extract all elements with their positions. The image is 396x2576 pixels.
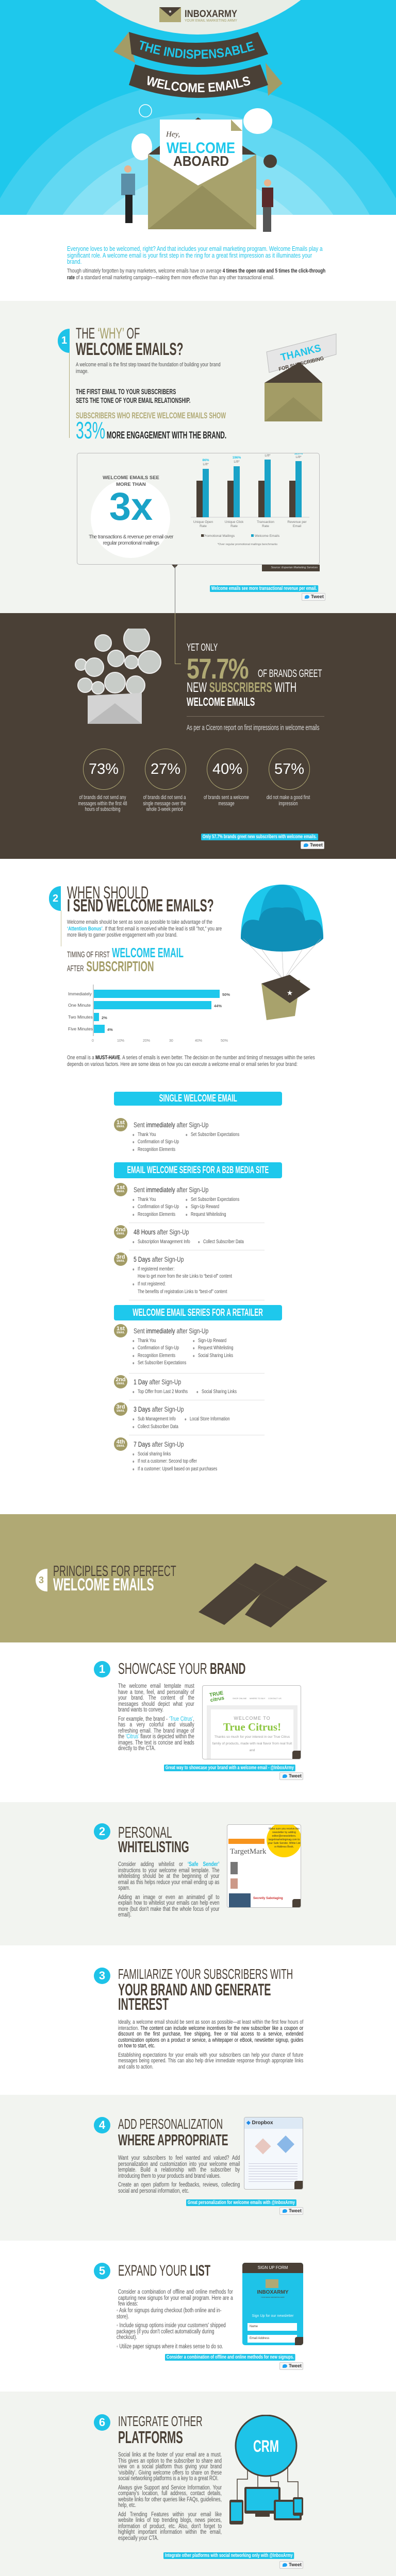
chart box: The transactions & revenue per email over regular promotional mailings <box>89 534 173 546</box>
stat circles: of brands sent a welcome message <box>204 794 249 807</box>
section 1: why: 33% MORE ENGAGEMENT WITH THE BRAND. <box>76 417 226 444</box>
section 2: when to send: If a customer: Upsell based on past purchases <box>138 1466 217 1472</box>
section 2: when to send: Sent immediately after Sign-Up <box>134 1327 208 1335</box>
section 2: when to send: Collect Subscriber Data <box>203 1239 244 1245</box>
principle 1: showcase brand: 1 <box>99 1663 105 1675</box>
bar chart: Lift* <box>265 454 271 457</box>
image: sign up form: INBOXARMY <box>257 2290 289 2295</box>
bar chart: Lift* <box>234 460 240 464</box>
principle 6: integrate platforms <box>0 2392 396 2576</box>
image: true citrus email: True Citrus! <box>223 1721 281 1733</box>
section 2: when to send: 2nd <box>116 1377 126 1383</box>
illustration: CRM: CRM <box>253 2437 279 2455</box>
section 2: when to send: Subscription Management Info <box>138 1239 190 1245</box>
tweet quote: Only 57.7% brands greet new subscribers with welcome emails. <box>203 834 317 840</box>
bar chart: timing: Five Minutes <box>68 1026 93 1031</box>
bar chart: Email <box>293 524 302 528</box>
principle 2: whitelisting: Consider adding whitelist or ‘Safe Sender’ instructions to your welcome email template. The whitelisting should be at the beginning of your email as this helps reduce your email ending up as spam. Adding an image or even an animated gif to explain how to whitelist your emails can help even more (but don't make that the whole focus of your email). <box>118 1861 220 1918</box>
stat circles: 73% <box>89 761 119 777</box>
image: targetmarketing newsletter: Make sure you receive this newsletter by adding editor@enewsletters. targetmarketingmag.com to your Safe Sender, White List or Address Book. <box>268 1827 301 1849</box>
bar chart: 196% <box>233 456 241 460</box>
section 2: when to send: 7 Days after Sign-Up <box>134 1440 184 1448</box>
illustration: people bubbles from envelope <box>75 629 161 724</box>
section 2: when to send: Confirmation of Sign-Up <box>138 1345 179 1351</box>
image: true citrus email: TRUE <box>209 1690 224 1698</box>
illustration: puzzle <box>199 1563 327 1628</box>
badge 1: 1 <box>61 335 67 346</box>
principle 6: integrate platforms: PLATFORMS <box>118 2428 183 2447</box>
image: targetmarketing newsletter: TargetMark <box>230 1848 266 1856</box>
section 3 header: principles: PRINCIPLES FOR PERFECT <box>53 1563 176 1580</box>
section 2: when to send: Set Subscriber Expectations <box>191 1132 239 1138</box>
bar chart: Revenue per <box>287 520 307 524</box>
bar chart <box>191 453 309 546</box>
badge 2 <box>49 886 61 911</box>
image: dropbox email <box>244 2117 303 2190</box>
principle 4: personalization: WHERE APPROPRIATE <box>118 2131 228 2149</box>
heading: WHEN SHOULD <box>67 883 148 903</box>
email series: b2b <box>114 1162 282 1178</box>
principle 5: expand list: Tweet <box>289 2363 302 2368</box>
stat circles: 40% <box>212 761 242 777</box>
principle 3: familiarize: INTEREST <box>118 1995 169 2013</box>
intro stat text: Though ultimately forgotten by many marketers, welcome emails have on average 4 times the open rate and 5 times the click-through rate of a standard email marketing campaign—making them more effective than any other transactional email. <box>67 268 325 280</box>
section 2: when to send: EMAIL <box>117 1382 125 1385</box>
section 2: when to send: 1st <box>117 1120 125 1126</box>
image: sign up form: SIGN UP FORM <box>258 2265 288 2270</box>
bar chart: timing: Two Minutes <box>68 1014 93 1020</box>
section 1: why: SUBSCRIBERS WHO RECEIVE WELCOME EMAILS SHOW <box>76 411 226 420</box>
chart title <box>67 945 184 974</box>
section 2: when to send: 1st <box>117 1184 125 1191</box>
illustration: thanks for subscribing: THANKS <box>279 343 322 364</box>
email series: retailer: WELCOME EMAIL SERIES FOR A RETAILER <box>133 1307 263 1318</box>
stat heading: 57.7% <box>187 652 248 685</box>
section 2: when to send: If registered member: <box>138 1266 174 1272</box>
principle 5: expand list: Consider a combination of offline and online methods for new signups. <box>167 2354 294 2360</box>
section 2: when to send: Sub Management Info <box>138 1416 176 1422</box>
heading: WELCOME EMAILS? <box>76 340 183 359</box>
section 2: when to send: 48 Hours after Sign-Up <box>134 1228 189 1236</box>
email series: single <box>114 1092 282 1106</box>
stat heading: NEW SUBSCRIBERS WITH <box>187 680 296 695</box>
principle 3: familiarize <box>0 1945 396 2095</box>
section 2: when to send: 5 Days after Sign-Up <box>134 1255 184 1263</box>
section 2: when to send: The benefits of registration Links to “best-of” content <box>138 1289 227 1295</box>
source tab: Source: Experian Marketing Services <box>271 566 318 569</box>
section 1: why: SETS THE TONE OF YOUR EMAIL RELATIONSHIP. <box>76 396 190 405</box>
bar chart: Transaction <box>257 520 274 524</box>
principle 2: whitelisting: PERSONAL <box>118 1823 172 1841</box>
heading: THE ‘WHY’ OF <box>76 325 140 342</box>
image: true citrus email <box>202 1685 301 1759</box>
illustration: thanks for subscribing: FOR SUBSCRIBING <box>278 355 325 372</box>
section 2: when to send: EMAIL <box>117 1445 125 1448</box>
image: sign up form: YOUR EMAIL MARKETING ARMY <box>261 2296 285 2298</box>
chart box: 3x <box>109 485 153 529</box>
principle 4: personalization: ADD PERSONALIZATION <box>118 2116 223 2132</box>
stat circles <box>78 749 310 812</box>
bar chart: timing: 50% <box>222 992 230 997</box>
section 2: when to send: EMAIL <box>117 1190 125 1193</box>
stat circles: did not make a good first impression <box>267 794 310 807</box>
stat heading <box>187 642 322 708</box>
envelope illustration: ABOARD <box>173 153 229 169</box>
section 2: when to send: Confirmation of Sign-Up <box>138 1139 179 1145</box>
image: targetmarketing newsletter <box>227 1824 301 1908</box>
tweet quote: Welcome emails see more transactional revenue per email. <box>211 586 317 591</box>
badge 2: 2 <box>53 893 58 904</box>
section 2: when to send: Local Store Information <box>190 1416 230 1422</box>
section 2: when to send: 3rd <box>116 1404 125 1410</box>
badge 1 <box>58 329 70 353</box>
principle 4: personalization: 4 <box>99 2119 105 2131</box>
stat heading: YET ONLY <box>187 642 218 653</box>
text: Welcome emails should be sent as soon as possible to take advantage of the ‘Attention Bonus’. If that first email is received while the lead is still "hot," you are more likely to garner positive engagement with your brand. <box>67 919 222 938</box>
section 2: when to send: 3rd <box>116 1254 125 1260</box>
title ribbon: WELCOME EMAILS <box>147 76 251 92</box>
chart box: WELCOME EMAILS SEE <box>103 475 159 481</box>
section 3 header: principles <box>0 1514 396 1642</box>
logo: YOUR EMAIL MARKETING ARMY <box>185 19 237 23</box>
image: dropbox email: ◆ Dropbox <box>246 2120 273 2126</box>
image: sign up form: Name <box>250 2325 258 2328</box>
illustration: CRM <box>229 2415 303 2524</box>
bar chart: timing: 0 <box>92 1039 94 1043</box>
email series: b2b: EMAIL WELCOME SERIES FOR A B2B MEDIA SITE <box>127 1164 269 1176</box>
intro text: Everyone loves to be welcomed, right? And that includes your email marketing program. Welcome Emails play a significant role. A welcome email is your first step in the ring for a great first impression as it illuminates your brand. <box>67 245 323 265</box>
chart box <box>77 453 320 565</box>
bar chart: Rate <box>262 524 269 528</box>
section 2: when to send: Top Offer from Last 2 Months <box>138 1389 188 1395</box>
stat heading: OF BRANDS GREET <box>258 668 322 680</box>
bar chart: *Over regular promotional mailings benchmarks <box>218 543 277 546</box>
principle 3: familiarize: FAMILIARIZE YOUR SUBSCRIBERS WITH <box>118 1966 293 1982</box>
principle 4: personalization: Tweet <box>289 2208 302 2213</box>
bar chart: timing: 20% <box>143 1039 150 1043</box>
people <box>121 165 273 232</box>
text: A welcome email is the first step toward the foundation of building your brand image. <box>76 362 221 374</box>
principle 3: familiarize: Ideally, a welcome email should be sent as soon as possible—at least within the first few hours of interaction. The content can include welcome incentives for the new subscriber like a coupon or discount on the first purchase, free shipping, free or trial access to a service, extended customization options on a product or service, a whitepaper or eBook, newsletter signup, guides on how to start, etc. Establishing expectations for your emails with your subscribers can help your chance of future messages being opened. This can also help drive immediate response through appropriate links and calls to action. <box>118 2019 303 2070</box>
bar chart: Rate <box>230 524 238 528</box>
principle 1: showcase brand: SHOWCASE YOUR BRAND <box>118 1659 245 1677</box>
principle 2: whitelisting: WHITELISTING <box>118 1838 189 1856</box>
section 2: when to send: Social sharing links <box>138 1451 171 1457</box>
section 1: why: THE FIRST EMAIL TO YOUR SUBSCRIBERS <box>76 387 176 396</box>
heading <box>67 883 214 916</box>
section: 57.7% stat: Tweet <box>310 842 323 848</box>
section 2: when to send: Request Whitelisting <box>198 1345 233 1351</box>
principle 5: expand list: 5 <box>99 2264 105 2277</box>
heading: I SEND WELCOME EMAILS? <box>67 896 214 916</box>
paragraph must-have: One email is a MUST-HAVE. A series of emails is even better. The decision on the number and timing of messages within the series depends on various factors. Here are some ideas on how you can execute a welcome email or email series for your brand: <box>67 1055 315 1067</box>
section 2: when to send: Recognition Elements <box>138 1353 175 1359</box>
section 2: when to send: If not registered: <box>138 1281 166 1287</box>
section 2: when to send: EMAIL <box>117 1331 125 1334</box>
image: true citrus email: SHOP ONLINE WHERE TO BUY CONTACT US <box>233 1697 282 1700</box>
image: true citrus email: WELCOME TO <box>234 1716 271 1721</box>
bar chart: timing: One Minute <box>68 1003 91 1008</box>
bar chart: Lift* <box>295 455 302 459</box>
section 2: when to send: Thank You <box>138 1132 156 1138</box>
section 2: when to send: Collect Subscriber Data <box>138 1424 178 1430</box>
bar chart: Unique Click <box>225 520 244 524</box>
section 2: when to send: Set Subscriber Expectations <box>191 1197 239 1202</box>
illustration: parachute: ★ <box>287 989 293 997</box>
section: 57.7% stat: As per a Ciceron report on first impressions in welcome emails <box>187 723 319 732</box>
section 3 header: principles: WELCOME EMAILS <box>53 1575 154 1595</box>
bar chart: 86% <box>202 459 209 462</box>
stat heading: WELCOME EMAILS <box>187 695 255 708</box>
section 2: when to send: Set Subscriber Expectations <box>138 1360 186 1366</box>
section 2: when to send: EMAIL <box>117 1125 125 1128</box>
bar chart: Rate <box>200 524 207 528</box>
section 2: when to send: 1st <box>117 1326 125 1332</box>
principle 6: integrate platforms: Tweet <box>289 2562 302 2567</box>
principle 1: showcase brand: The welcome email template must have a tone, feel, and personality of your brand. The content of the messages should depict what your brand wants to convey. For example, the brand - ‘True Citrus’, has a very colorful and visually refreshing email. The brand image of the ‘Citrus’ flavor is depicted within the images. The text is concise and leads directly to the CTA. <box>118 1683 194 1752</box>
principle 6: integrate platforms: 6 <box>99 2416 105 2429</box>
principle 1: showcase brand <box>0 1642 396 1802</box>
section 2: when to send: 4th <box>117 1439 125 1445</box>
section 2: when to send: 1 Day after Sign-Up <box>134 1378 181 1386</box>
section 2: when to send: Recognition Elements <box>138 1147 175 1153</box>
section 2: when to send: Thank You <box>138 1197 156 1202</box>
principle 6: integrate platforms: INTEGRATE OTHER <box>118 2413 203 2429</box>
logo <box>159 7 237 23</box>
stat circles: 27% <box>151 761 180 777</box>
chart title: AFTER SUBSCRIPTION <box>67 958 154 974</box>
section 2: when to send: Sign-Up Reward <box>191 1204 219 1210</box>
principle 3: familiarize: 3 <box>99 1969 105 1982</box>
title ribbon: THE INDISPENSABLE <box>140 40 255 59</box>
section 2: when to send: Social Sharing Links <box>202 1389 237 1395</box>
hero section <box>0 0 396 232</box>
principle 4: personalization: Great personalization for welcome emails with @InboxArmy <box>188 2200 295 2206</box>
section 2: when to send: Confirmation of Sign-Up <box>138 1204 179 1210</box>
section 2: when to send: EMAIL <box>117 1260 125 1263</box>
principle 5: expand list: ◦ Utilize paper signups where it makes sense to do so. <box>117 2343 223 2349</box>
chart box: MORE THAN <box>116 482 146 487</box>
principle 4: personalization: Want your subscribers to feel wanted and valued? Add personalization and customization into your welcome email template. Build a relationship with the subscriber by introducing them to your products and brand values. Create an open platform for feedbacks, reviews, collecting social and personal information, etc. <box>118 2155 240 2194</box>
title ribbon <box>113 32 283 98</box>
3x circle <box>91 479 170 558</box>
principle 2: whitelisting: 2 <box>99 1825 105 1838</box>
principle 5: expand list: Consider a combination of offline and online methods for capturing new signups for your email program. Here are a few ideas: <box>118 2289 233 2307</box>
principle 1: showcase brand: Great way to showcase your brand with a welcome email - @InboxArmy <box>166 1765 294 1771</box>
bar chart: timing: 30 <box>169 1039 173 1043</box>
section 2: when to send: Thank You <box>138 1338 156 1344</box>
chart title: TIMING OF FIRST WELCOME EMAIL <box>67 945 184 960</box>
source tab <box>262 565 320 571</box>
principle 3: familiarize: YOUR BRAND AND GENERATE <box>118 1980 271 1999</box>
principle 5: expand list: ◦ Ask for signups during checkout (both online and in-store). <box>117 2308 221 2319</box>
principle 5: expand list: EXPAND YOUR LIST <box>118 2262 210 2279</box>
section 2: when to send: Sent immediately after Sign-Up <box>134 1185 208 1194</box>
section 2: when to send: EMAIL <box>117 1232 125 1235</box>
bar chart: timing: 40% <box>195 1039 202 1043</box>
image: sign up form <box>242 2263 303 2345</box>
stat circles: of brands did not send a single message over the whole 3-week period <box>143 794 186 812</box>
section 3 header: principles: 3 <box>39 1575 44 1585</box>
section 2: when to send <box>0 859 396 1514</box>
section 2: when to send: Recognition Elements <box>138 1212 175 1217</box>
image: true citrus email: Thanks so much for your interest in our True Citrus family of products, made with real flavor from real fruit and <box>212 1735 292 1752</box>
section 2: when to send: 2nd <box>116 1227 126 1233</box>
bar chart: Lift* <box>203 463 209 466</box>
section 2: when to send: How to get more from the site Links to “best-of” content <box>138 1274 232 1279</box>
principle 5: expand list <box>0 2241 396 2392</box>
logo: INBOXARMY <box>185 9 237 20</box>
bar chart: Unique Open <box>193 520 213 524</box>
envelope illustration: Hey, <box>166 130 180 139</box>
principle 1: showcase brand: Tweet <box>289 1773 302 1778</box>
logo: ★ <box>168 9 172 14</box>
section 2: when to send: Sent immediately after Sign-Up <box>134 1121 208 1129</box>
bar chart: timing: 10% <box>117 1039 124 1043</box>
image: sign up form: Email Address <box>250 2337 269 2340</box>
section 2: when to send: If not a customer: Second top offer <box>138 1459 197 1464</box>
bar chart: timing <box>68 985 230 1043</box>
bar chart: timing: 44% <box>214 1004 222 1008</box>
section 1: why <box>0 301 396 613</box>
email series: retailer <box>114 1305 282 1320</box>
stat circles: of brands did not send any messages within the first 48 hours of subscribing <box>78 794 127 812</box>
illustration: parachute <box>241 885 323 1020</box>
stat circles: 57% <box>274 761 304 777</box>
bar chart: timing: 50% <box>221 1039 228 1043</box>
image: targetmarketing newsletter: Secretly Sabotaging <box>253 1897 283 1900</box>
section 1: why: Tweet <box>311 594 324 599</box>
principle 2: whitelisting <box>0 1802 396 1945</box>
principle 4: personalization <box>0 2095 396 2241</box>
icon: clouds and globe <box>131 105 277 168</box>
bar chart: timing: Immediately <box>68 991 92 996</box>
section 2: when to send: Social Sharing Links <box>198 1353 233 1359</box>
heading <box>76 325 183 359</box>
envelope illustration: WELCOME <box>167 140 235 157</box>
image: sign up form: Sign Up for our newsletter <box>252 2314 293 2318</box>
section 2: when to send: Request Whitelisting <box>191 1212 226 1217</box>
bar chart: Welcome Emails <box>255 534 280 538</box>
section 2: when to send: EMAIL <box>117 1410 125 1413</box>
principle 6: integrate platforms: Social links at the footer of your email are a must. This gives an option to the subscriber to share and view on a social platform thus giving your brand ‘visibility’. Giving welcome offers to share on these social networking platforms is a key to a great ROI. Always give Support and Service Information. Your company's location, full address, contact details, website links for other queries like FAQs, guidelines, help, etc. Add Trending Features within your email like website links of top trending blogs, news pieces, information of product, etc. Also, don't forget to highlight important information within the email, especially your CTA. <box>118 2452 222 2541</box>
bar chart: Promotional Mailings <box>204 534 235 538</box>
principle 5: expand list: ◦ Include signup options inside your customers' shipped packages (if you don't collect automatically during checkout). <box>117 2323 226 2341</box>
section: 57.7% stat <box>0 613 396 859</box>
email series: single: SINGLE WELCOME EMAIL <box>159 1093 237 1104</box>
bar chart: timing: 2% <box>102 1015 107 1020</box>
section 2: when to send: Sign-Up Reward <box>198 1338 226 1344</box>
section 2: when to send: 3 Days after Sign-Up <box>134 1405 184 1413</box>
bar chart: timing: 4% <box>107 1027 113 1032</box>
illustration: thanks for subscribing <box>265 334 336 421</box>
principle 6: integrate platforms: Integrate other platforms with social networking only with @InboxArmy <box>165 2553 293 2558</box>
envelope illustration <box>148 117 256 229</box>
image: true citrus email: citrus <box>210 1696 225 1703</box>
